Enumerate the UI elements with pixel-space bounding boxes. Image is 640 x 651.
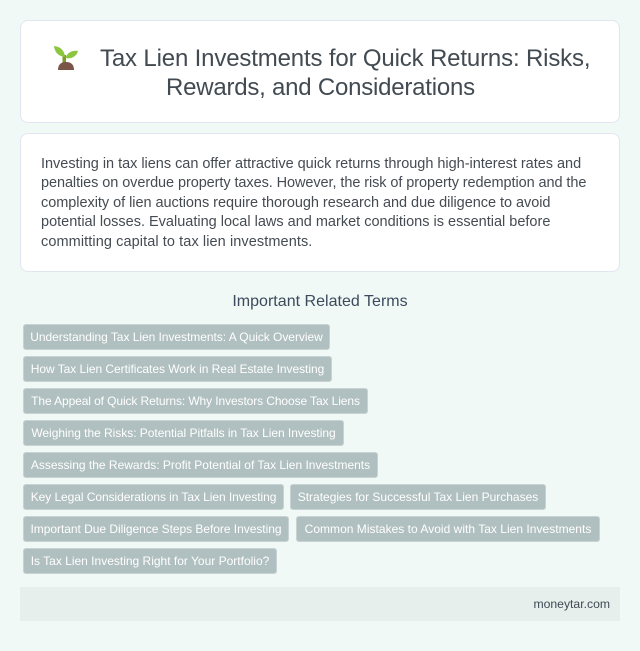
tag 2: How Tax Lien Certificates Work in Real Estate Investing [31, 362, 324, 376]
title: Tax Lien Investments for Quick Returns: Risks, [100, 45, 590, 72]
tag 6: Key Legal Considerations in Tax Lien Investing [31, 490, 276, 504]
summary text: penalties on overdue property taxes. However, the risk of property redemption and the [41, 175, 586, 191]
summary text: Investing in tax liens can offer attractive quick returns through high-interest rates and [41, 156, 581, 172]
tag 4: Weighing the Risks: Potential Pitfalls in Tax Lien Investing [31, 426, 336, 440]
icon: sprout [54, 46, 78, 70]
footer bar [20, 587, 620, 621]
tag list [23, 324, 600, 574]
tag 4 [23, 420, 344, 446]
tag 1: Understanding Tax Lien Investments: A Quick Overview [30, 330, 323, 344]
tag 5: Assessing the Rewards: Profit Potential of Tax Lien Investments [31, 458, 370, 472]
tag 10: Is Tax Lien Investing Right for Your Portfolio? [31, 554, 269, 568]
footer source: moneytar.com [533, 597, 610, 611]
tag 5 [23, 452, 378, 478]
panel: summary card [20, 133, 620, 272]
tag 8: Important Due Diligence Steps Before Investing [31, 522, 281, 536]
tag 1 [23, 324, 330, 350]
panel: title card [20, 20, 620, 123]
tag 8 [23, 516, 289, 542]
tag 3 [23, 388, 368, 414]
heading: related terms: Important Related Terms [232, 293, 408, 310]
title: Rewards, and Considerations [166, 74, 475, 101]
tag 10 [23, 548, 277, 574]
summary text: complexity of lien auctions require thorough research and due diligence to avoid [41, 194, 550, 210]
tag 9: Common Mistakes to Avoid with Tax Lien Investments [305, 522, 591, 536]
summary text [41, 156, 586, 250]
tag 3: The Appeal of Quick Returns: Why Investors Choose Tax Liens [31, 394, 360, 408]
tag 2 [23, 356, 332, 382]
summary text: committing capital to tax lien investments. [41, 234, 312, 250]
summary text: potential losses. Evaluating local laws and market conditions is essential before [41, 214, 550, 230]
tag 7 [290, 484, 546, 510]
tag 6 [23, 484, 284, 510]
title [100, 45, 590, 101]
tag 7: Strategies for Successful Tax Lien Purchases [298, 490, 538, 504]
tag 9 [296, 516, 600, 542]
